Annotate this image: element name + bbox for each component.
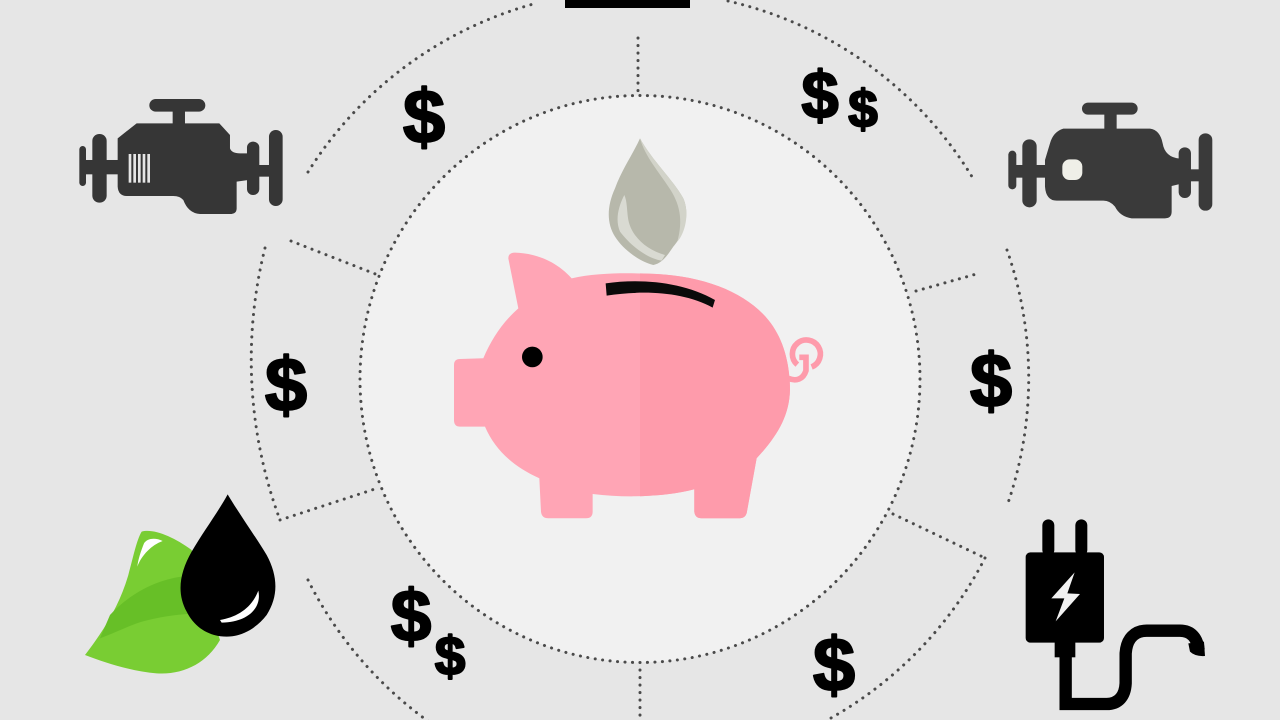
drop crescent highlight <box>618 195 665 261</box>
icon: piggy bank <box>454 253 820 518</box>
engine grille <box>129 154 150 183</box>
icon: black oil drop <box>181 494 275 637</box>
drop right rim <box>640 138 686 242</box>
dollar sign: left: $ <box>265 343 307 428</box>
pig eye <box>522 347 543 367</box>
icon: engine with round port <box>1008 103 1212 218</box>
dollar signs: lower left pair <box>391 576 465 687</box>
dollar signs: upper right pair: $ <box>848 80 878 139</box>
dollar signs: upper right pair <box>801 58 878 139</box>
coin slot <box>606 281 715 308</box>
dollar sign: lower right: $ <box>813 623 855 708</box>
drop highlight <box>220 591 259 623</box>
dollar sign: upper left: $ <box>403 75 445 160</box>
pig body <box>454 253 790 518</box>
dollar signs: upper right pair: $ <box>801 58 839 133</box>
power cable <box>1066 631 1199 704</box>
lightning bolt <box>1051 572 1080 621</box>
top icon cropped by the edge <box>565 0 690 8</box>
pig tail <box>788 340 820 380</box>
icon: green leaf <box>85 531 220 673</box>
dollar sign: right: $ <box>970 339 1012 424</box>
dollar signs: lower left pair: $ <box>391 576 431 657</box>
dollar signs: lower left pair: $ <box>435 625 465 687</box>
centre circle panel <box>360 96 920 662</box>
leaf highlight <box>137 539 163 567</box>
icon: engine with grille <box>79 99 283 214</box>
icon: electric plug <box>1026 519 1205 704</box>
outer dotted ring segments <box>251 1 1029 720</box>
engine port <box>1062 159 1082 180</box>
pig body shaded half <box>640 273 790 518</box>
icon: grey fuel drop <box>609 138 686 265</box>
leaf middle band <box>100 577 203 638</box>
